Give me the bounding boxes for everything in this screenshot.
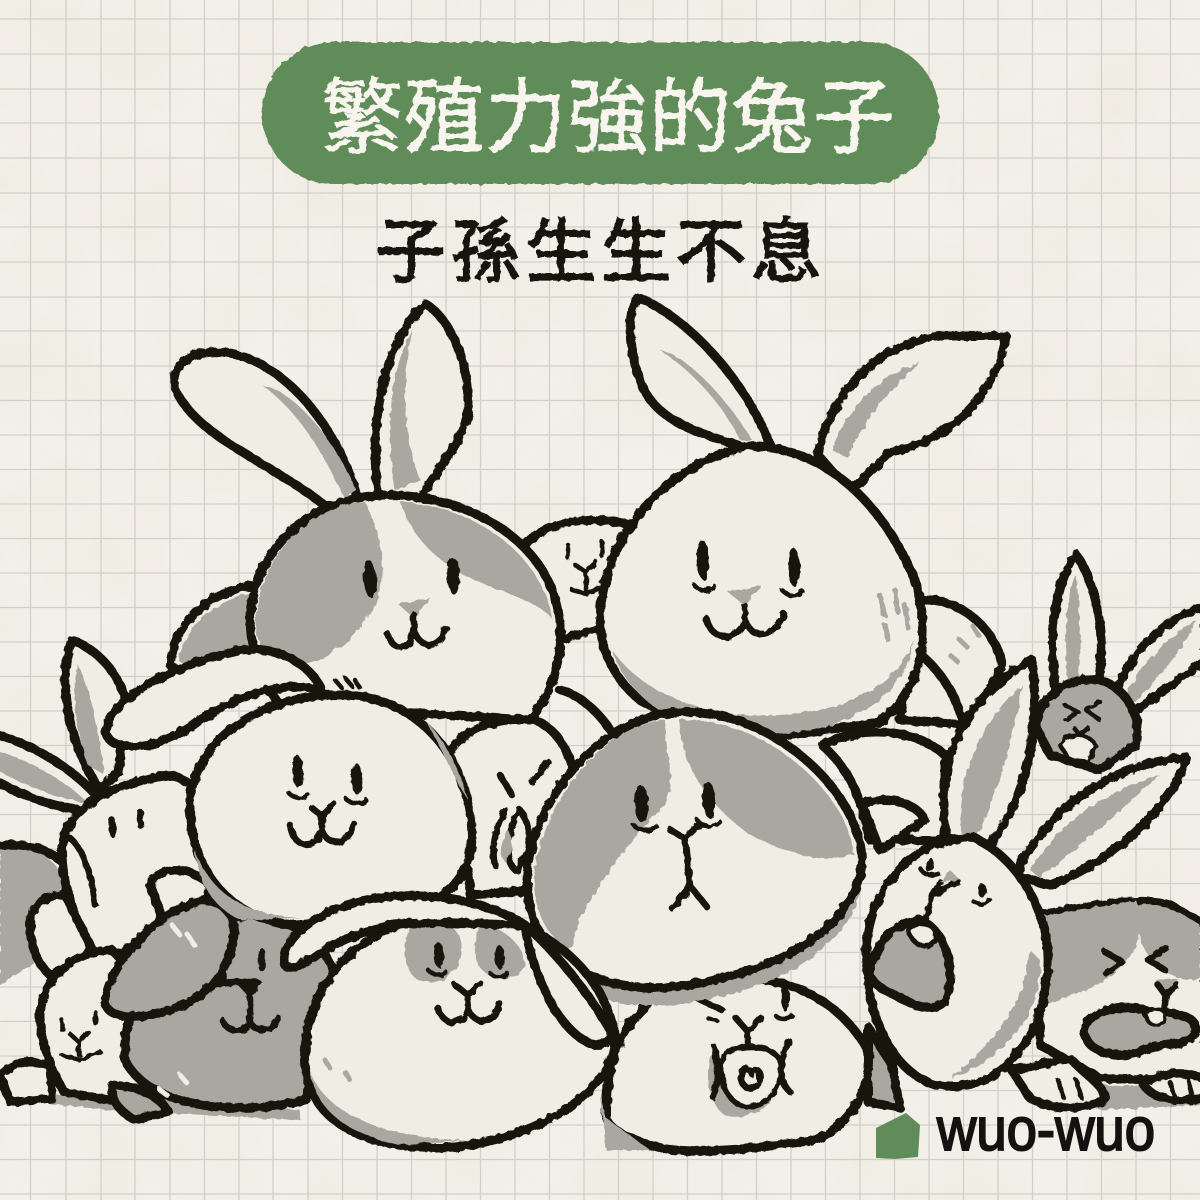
- big centre gray bunny: [527, 712, 862, 1006]
- left white bunny: [30, 775, 225, 975]
- back round bunny left: [170, 585, 300, 690]
- bottom centre lop bunny: [284, 896, 615, 1148]
- bottom middle bunny: [600, 978, 900, 1151]
- subtitle: 子孫生生不息: [376, 213, 826, 291]
- top left gray bunny: [174, 304, 560, 720]
- middle left lop bunny: [105, 649, 472, 925]
- logo: wuo-wuo: [936, 1096, 1155, 1163]
- small back bunny top centre: [525, 520, 660, 640]
- left gray bunny: [0, 845, 62, 985]
- title banner: [262, 42, 939, 184]
- small bunny behind centre: [444, 690, 618, 895]
- ground shadow: [0, 1082, 1200, 1120]
- icon: green house: [876, 1113, 920, 1159]
- rabbit pile illustration: [0, 298, 1200, 1151]
- far left bunny ears: [0, 640, 127, 812]
- far right dark bunny: [1035, 554, 1200, 770]
- back round bunny right: [900, 599, 1002, 725]
- small bottom left bunny: [0, 950, 160, 1105]
- yawning bunny: [866, 660, 1186, 1086]
- centre right small white bunny: [822, 732, 945, 850]
- top right white bunny: [600, 298, 1006, 745]
- dark lop bunny: [105, 900, 337, 1120]
- bottom right gray bunny: [1010, 900, 1200, 1107]
- title banner: 繁殖力強的兔子: [321, 73, 895, 164]
